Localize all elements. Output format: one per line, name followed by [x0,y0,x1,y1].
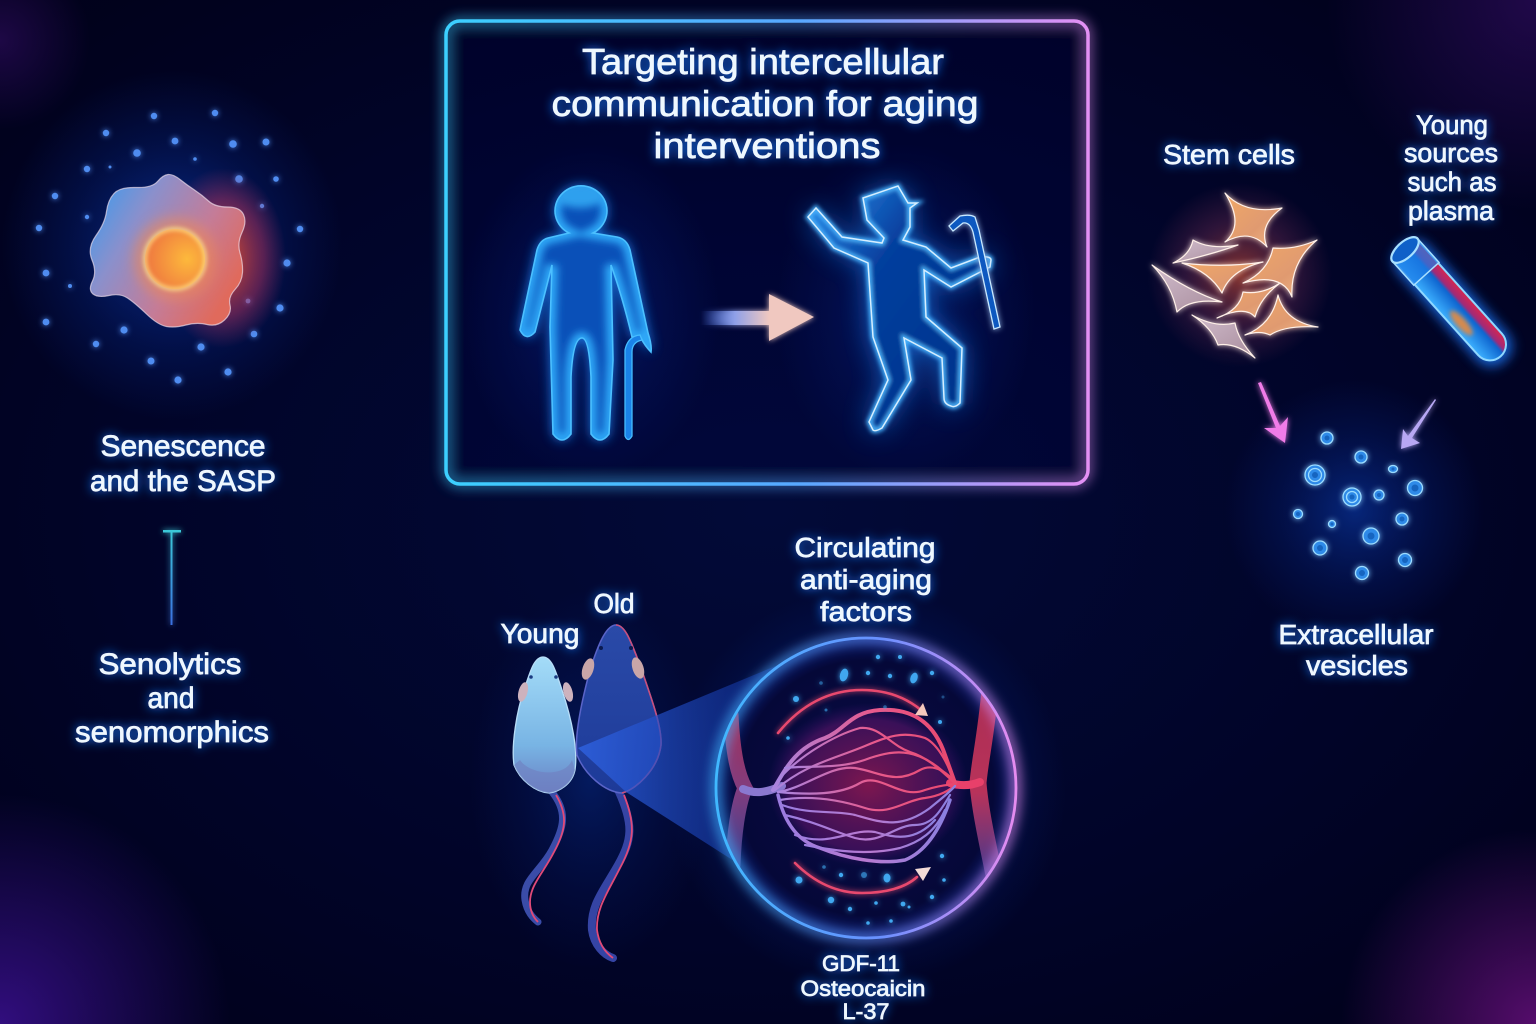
frame outline [446,21,1088,484]
title: Targeting intercellular [582,41,944,82]
label: extracellular vesicles: vesicles [1306,650,1408,681]
label: senolytics and senomorphics: Senolytics [98,648,242,681]
illustration: young mouse [513,657,576,922]
illustration: magnified capillary network [716,638,1016,938]
label: young sources such as plasma: sources [1404,138,1498,168]
label: circulating anti-aging factors: Circulating [794,532,936,563]
arrow: plasma to vesicles [1401,399,1436,449]
label: young sources such as plasma: plasma [1408,196,1495,226]
label: extracellular vesicles [1278,619,1434,681]
label: senescence and the SASP [90,430,276,498]
title: interventions [654,125,880,166]
label: senescence and the SASP: and the SASP [90,465,276,498]
label: senescence and the SASP: Senescence [100,430,266,463]
SASP particles [36,110,303,384]
panel: central framed title [446,21,1088,484]
title: communication for aging [552,83,978,124]
arrow: aging to rejuvenated [701,294,814,341]
circulating factor particles [786,655,946,925]
label: young sources such as plasma: such as [1408,167,1496,197]
icon: stem cells [1148,183,1332,367]
circulation arrows [778,690,921,893]
list: factor names [800,951,926,1024]
left and right vessel trunks [731,690,994,875]
title [552,41,978,166]
label: Old: Old [594,588,634,619]
label: circulating anti-aging factors [794,532,936,627]
arrow: stem cells to vesicles [1258,382,1288,443]
label: young sources such as plasma: Young [1416,110,1488,140]
label: senolytics and senomorphics: senomorphics [75,716,269,749]
label: circulating anti-aging factors: anti-aging [800,564,932,595]
label: Young: Young [500,618,580,649]
icon: old person with cane [520,184,651,440]
label: circulating anti-aging factors: factors [820,596,912,627]
panel: parabiosis and circulating factors [500,532,1016,1024]
icon: rejuvenated dancing figure [808,186,1000,431]
list: factor names: Osteocaicin [800,976,926,1001]
magnification beam [578,660,790,868]
panel: senescence [36,110,303,749]
label: stem cells: Stem cells [1163,139,1295,170]
icon: plasma test tube [1385,231,1520,374]
icon: senescent cell with SASP dots [36,110,303,384]
label: senolytics and senomorphics [75,648,269,749]
list: factor names: GDF-11 [822,951,900,976]
label: extracellular vesicles: Extracellular [1278,619,1434,650]
label: senolytics and senomorphics: and [148,682,194,715]
illustration: old mouse [576,625,661,958]
icon: extracellular vesicles [1294,432,1422,580]
list: factor names: L-37 [842,999,890,1024]
label: young sources such as plasma [1404,110,1498,226]
inhibition bar [163,530,181,625]
capillaries [773,710,955,810]
panel: stem cells, young sources, extracellular vesicles [1148,110,1520,681]
